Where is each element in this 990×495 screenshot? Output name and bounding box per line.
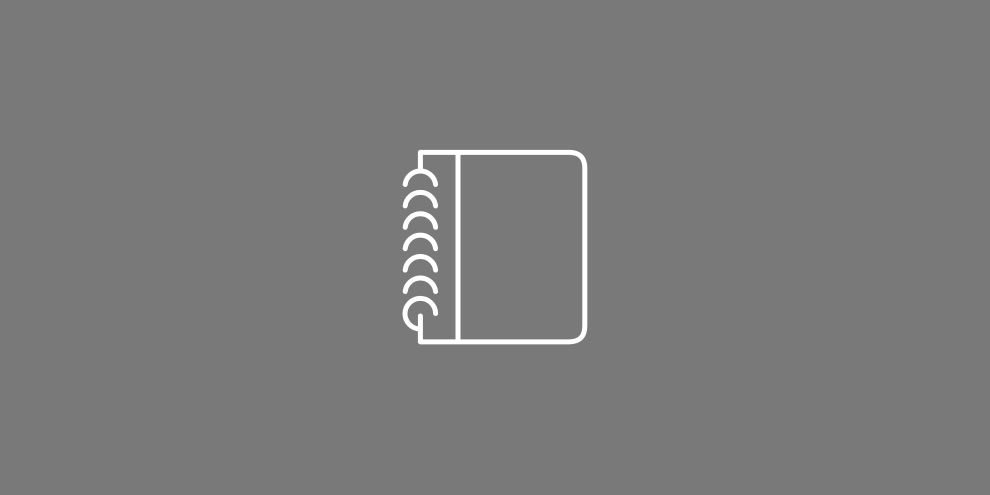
spiral binding rings: [405, 171, 436, 329]
icon: spiral notebook: [405, 152, 585, 342]
notebook cover outline: [420, 152, 585, 342]
notebook spine line: [456, 152, 460, 342]
